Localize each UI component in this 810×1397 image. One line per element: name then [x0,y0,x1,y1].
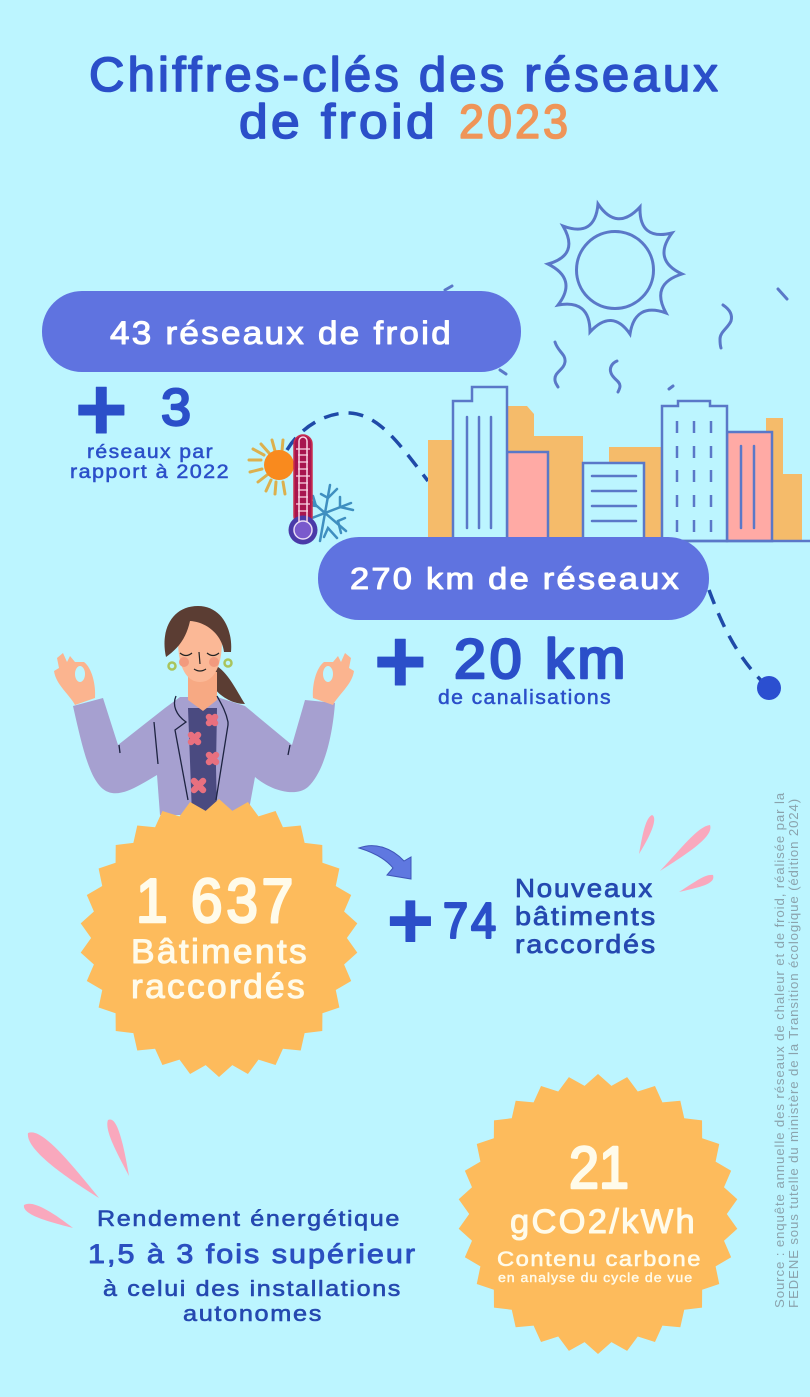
panel: 270 km de réseaux: 270 km de réseaux [350,561,681,596]
badge: 21 gCO2/kWh contenu carbone: 21 [569,1135,629,1201]
illustration: meditating woman [54,606,354,815]
stat: plus 3 réseaux: + [75,360,133,460]
heat squiggles [445,286,787,392]
dashed route to end point [709,590,781,700]
stat: plus 74 nouveaux bâtiments: bâtiments [515,901,657,931]
stat: plus 3 réseaux [70,360,230,483]
panel: 270 km de réseaux [318,537,709,620]
text block: rendement énergétique: Rendement énergétique [97,1206,401,1231]
icon: thermometer with sun and snowflake [249,435,353,544]
icon: sun outline [548,204,682,334]
icon: curved arrow [359,846,411,879]
stat: plus 74 nouveaux bâtiments: raccordés [515,929,657,959]
title [89,49,721,149]
stat: plus 3 réseaux: réseaux par [87,442,214,463]
badge: 1 637 bâtiments raccordés [81,799,357,1077]
badge: 1 637 bâtiments raccordés: raccordés [131,968,307,1006]
stat: plus 20 km: 20 km [454,627,629,690]
text block: rendement énergétique: à celui des installations [103,1276,402,1301]
badge: 21 gCO2/kWh contenu carbone: gCO2/kWh [510,1203,697,1241]
stat: plus 74 nouveaux bâtiments: + [387,876,439,965]
badge: 21 gCO2/kWh contenu carbone: en analyse du cycle de vue [498,1270,693,1285]
source note: FEDENE sous tutelle du ministère de la Transition écologique (édition 2024) [787,798,801,1308]
stat: plus 3 réseaux: rapport à 2022 [70,462,230,483]
decorative pink petals top right [639,815,713,892]
stat: plus 74 nouveaux bâtiments: 74 [443,893,499,949]
illustration: city skyline [428,387,810,541]
title: 2023 [459,96,571,149]
badge: 21 gCO2/kWh contenu carbone: Contenu carbone [497,1248,702,1271]
text block: rendement énergétique [88,1206,417,1326]
badge: 1 637 bâtiments raccordés: Bâtiments [131,933,309,971]
text block: rendement énergétique: autonomes [183,1301,323,1326]
dashed route: thermometer to city [287,413,428,481]
badge: 21 gCO2/kWh contenu carbone [459,1074,737,1354]
panel: 43 réseaux de froid [42,291,521,372]
title: Chiffres-clés des réseaux [89,49,721,102]
title: de froid [239,96,438,149]
stat: plus 20 km: + [374,612,432,712]
panel: 43 réseaux de froid: 43 réseaux de froid [110,315,453,351]
source note: Source : enquête annuelle des réseaux de chaleur et de froid, réalisée par la [773,792,787,1308]
source note [773,792,801,1308]
stat: plus 3 réseaux: 3 [161,379,191,437]
text block: rendement énergétique: 1,5 à 3 fois supérieur [88,1239,417,1269]
badge: 1 637 bâtiments raccordés: 1 637 [136,867,297,936]
decorative pink petals bottom left [24,1119,129,1228]
stat: plus 74 nouveaux bâtiments: Nouveaux [515,873,654,903]
stat: plus 20 km: de canalisations [438,687,612,709]
stat: plus 20 km [374,612,629,712]
stat: plus 74 nouveaux bâtiments [387,873,657,965]
